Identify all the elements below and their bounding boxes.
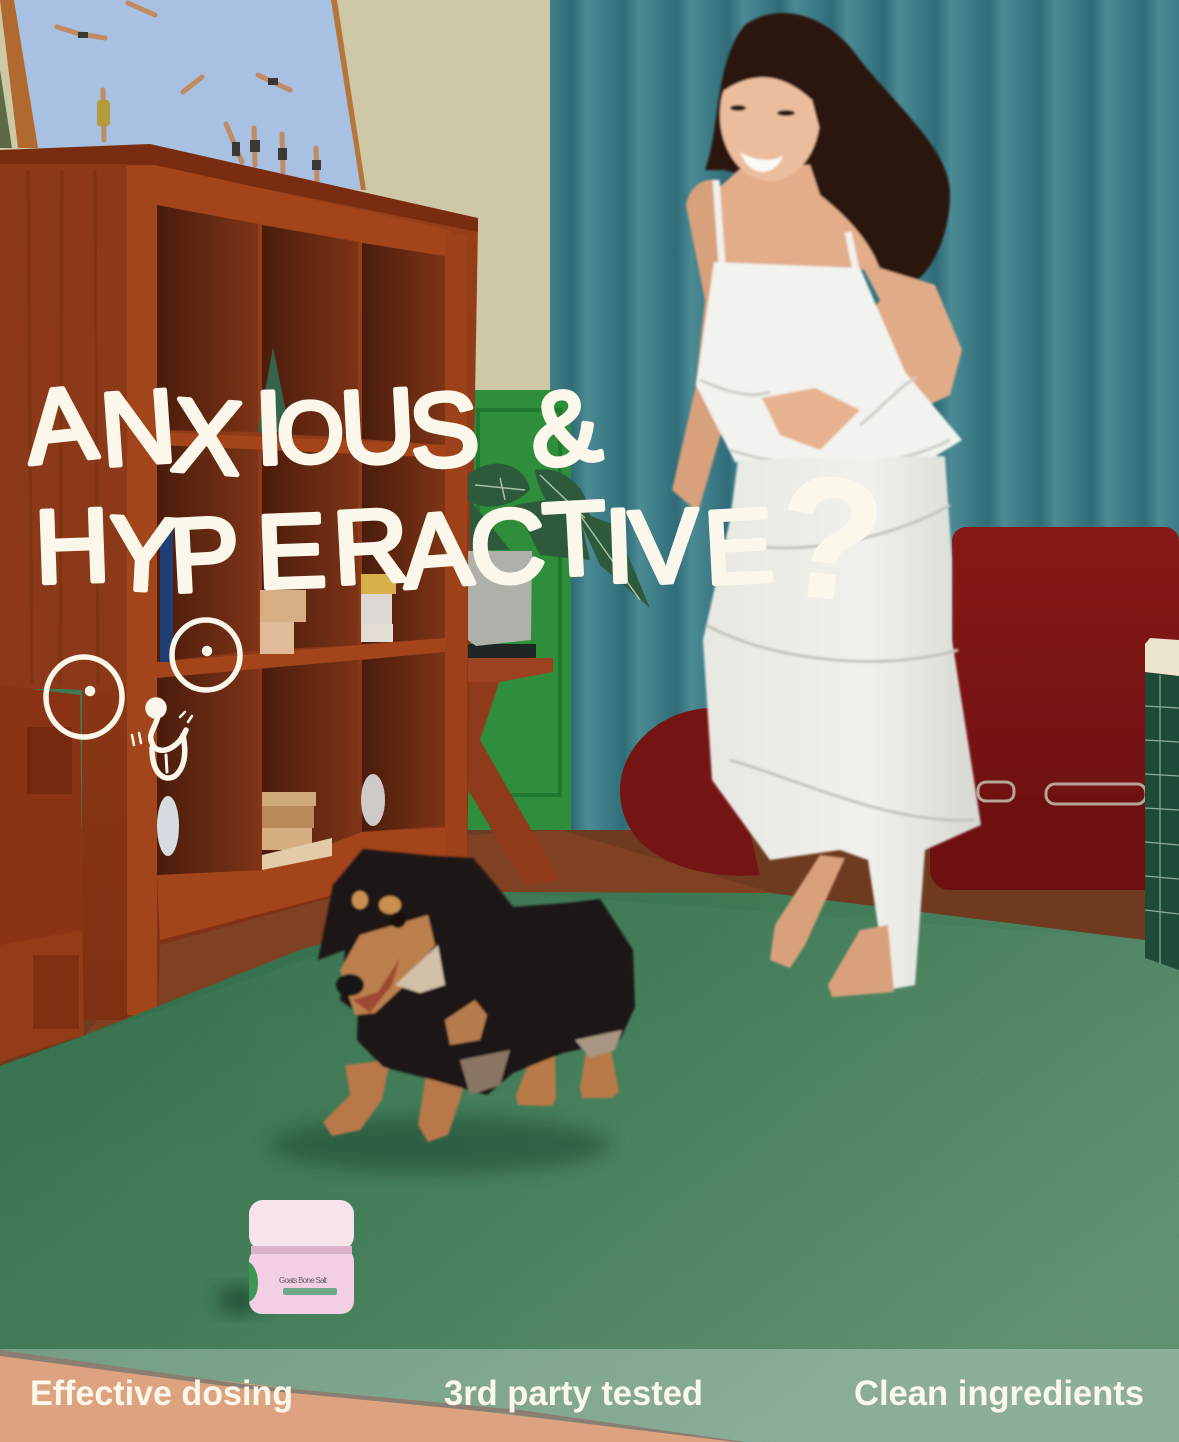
smile: [740, 152, 783, 172]
leaves: [468, 464, 650, 608]
red sofa: [620, 527, 1179, 890]
sofa left cushion: [620, 708, 760, 876]
hair back: [705, 13, 950, 285]
supplement jar: [216, 1200, 354, 1314]
cubbies: [157, 205, 445, 880]
decorative tree: [258, 347, 290, 432]
hair fringe: [722, 32, 826, 150]
headline question mark: ?: [768, 438, 893, 640]
left arm: [672, 180, 725, 512]
translucent bottom strip: [0, 1349, 1179, 1442]
ruffled top: [696, 262, 962, 478]
eyes: [730, 105, 795, 116]
swimsuits: [78, 32, 321, 170]
back legs: [516, 1045, 619, 1106]
jar badge: [249, 1262, 258, 1302]
stool top: [468, 658, 553, 682]
shelf side panel grain: [28, 170, 98, 685]
room background wall: [0, 0, 1179, 400]
headline line one: ANXIOUS &: [20, 364, 607, 498]
green carpet: [0, 892, 1179, 1442]
eye: [390, 912, 406, 928]
shelf outer body: [0, 160, 478, 1020]
jar lid: [249, 1200, 354, 1250]
dress straps: [716, 180, 856, 270]
jar shadow: [216, 1286, 264, 1314]
leaf veins: [475, 475, 640, 600]
shelf top rail: [155, 165, 450, 258]
painting of swimmers: [0, 0, 366, 190]
benefit label: 3rd party tested: 3rd party tested: [444, 1374, 703, 1413]
shelf top board: [0, 144, 478, 232]
doodle right eye: [172, 620, 240, 690]
blue book: [160, 530, 173, 662]
right hand over top: [762, 388, 860, 450]
legs and feet: [770, 855, 894, 997]
shelf front edges: [157, 638, 445, 678]
doodle nose and tongue: [132, 700, 192, 778]
headline: [20, 364, 893, 640]
green wall panel: [467, 390, 571, 835]
tiled box: [1145, 638, 1179, 970]
jar neck: [251, 1246, 352, 1254]
face: [720, 49, 820, 181]
jar body: [249, 1248, 354, 1314]
stacked books middle: [260, 574, 396, 654]
stool legs: [468, 680, 560, 885]
wooden bookshelf: [0, 144, 478, 1020]
sofa lower cushion: [930, 795, 1179, 890]
benefit label: clean ingredients: Clean ingredients: [854, 1374, 1144, 1413]
doodle left eye: [46, 657, 122, 737]
upper drawer knob: [27, 727, 72, 794]
jar label strip: [283, 1288, 337, 1295]
pot: [468, 551, 532, 646]
neck and chest: [716, 165, 880, 270]
ruff: [395, 945, 445, 993]
skirt tier lines: [706, 505, 975, 820]
rear lighter fur: [575, 1030, 622, 1058]
pot base: [468, 644, 536, 658]
doodle dog face: [46, 620, 240, 778]
floor: [0, 830, 1179, 1100]
right arm: [760, 262, 962, 452]
stacked books bottom: [262, 774, 385, 870]
front legs: [323, 1050, 470, 1142]
nose: [336, 974, 364, 996]
white vase: [157, 796, 179, 856]
skirt: [703, 456, 981, 990]
curtains: [550, 0, 1179, 833]
swimmers figures: [57, 3, 317, 181]
bottom floor corner: [0, 1350, 740, 1442]
dachshund dog: [318, 849, 635, 1142]
ruffle shading: [700, 378, 950, 466]
benefit label: effective dosing: Effective dosing: [30, 1374, 293, 1413]
drawer cabinet: [0, 685, 84, 1062]
chest tan patch: [445, 1000, 487, 1045]
shelf upright: [127, 165, 157, 1015]
carpet grain: [0, 892, 1179, 1442]
shelf right end: [445, 232, 467, 868]
potted plant on stool: [468, 464, 650, 885]
lower drawer knob: [33, 955, 79, 1029]
muzzle tan: [340, 915, 435, 1015]
brow spots: [352, 891, 401, 914]
body and head dark coat: [318, 849, 635, 1095]
headline line two: HYPERACTIVE: [33, 480, 776, 615]
shelf left side panel: [0, 164, 127, 689]
mouth: [353, 958, 400, 1013]
sofa metal straps: [978, 782, 1146, 804]
jar label title: Goats Bone Salt: [279, 1276, 328, 1285]
woman running in white dress: [672, 13, 981, 997]
dog shadow: [270, 1117, 610, 1173]
